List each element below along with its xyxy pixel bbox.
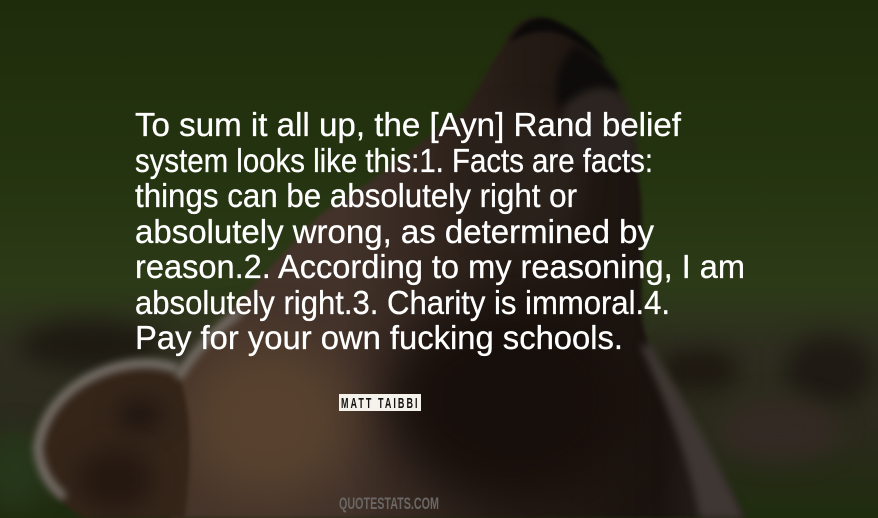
quote text: Pay for your own fucking schools.	[135, 319, 623, 356]
author label: MATT TAIBBI	[341, 395, 420, 412]
quote text: reason.2. According to my reasoning, I am	[135, 248, 745, 285]
quote text: absolutely wrong, as determined by	[135, 213, 654, 250]
quote text: things can be absolutely right or	[135, 177, 577, 214]
bear ear	[36, 312, 240, 518]
quote text: absolutely right.3. Charity is immoral.4.	[135, 284, 670, 321]
site watermark: QUOTESTATS.COM	[339, 494, 439, 513]
bear snout and nose	[510, 18, 640, 165]
quote text: system looks like this:1. Facts are facts:	[135, 142, 653, 179]
bear body and head	[170, 18, 745, 518]
quote text	[135, 106, 745, 356]
quote text: To sum it all up, the [Ayn] Rand belief	[135, 106, 682, 143]
